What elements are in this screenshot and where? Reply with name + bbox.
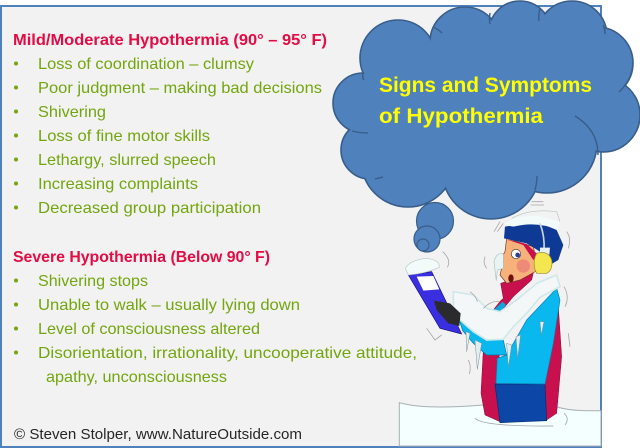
illustration: freezing person in snow	[399, 202, 601, 446]
bullet list: severe signs: Disorientation, irrationality, uncooperative attitude,	[38, 345, 417, 362]
bullet list: mild signs: Shivering	[38, 104, 106, 121]
bullet list: mild signs	[14, 56, 322, 217]
scarf	[490, 273, 533, 316]
bullet list: mild signs: Increasing complaints	[38, 176, 198, 193]
hat band	[506, 239, 538, 260]
heading: mild/moderate hypothermia: Mild/Moderate Hypothermia (90° – 95° F)	[13, 32, 327, 49]
shiver lines	[427, 202, 570, 426]
frozen nose drip	[494, 254, 503, 281]
hat snow	[503, 216, 560, 230]
snow on arm and shoulder	[453, 275, 560, 340]
glove	[434, 301, 461, 326]
bullet list: mild signs: Loss of fine motor skills	[38, 128, 210, 145]
bullet list: mild signs: Poor judgment – making bad decisions	[38, 80, 322, 97]
cloud title	[379, 74, 592, 128]
thought bubbles	[414, 202, 454, 252]
jacket collar	[489, 302, 506, 317]
book page	[417, 276, 439, 291]
bullet list: severe signs: Unable to walk – usually lying down	[38, 297, 300, 314]
eye	[511, 249, 521, 259]
cloud title: of Hypothermia	[379, 105, 543, 128]
text block: mild and moderate hypothermia	[13, 32, 327, 217]
cloud title: Signs and Symptoms	[379, 74, 592, 97]
bullet list: mild signs: Lethargy, slurred speech	[38, 152, 216, 169]
face	[499, 238, 538, 283]
earmuff	[534, 223, 552, 273]
bullet list: severe signs: Shivering stops	[38, 273, 148, 290]
coat right	[544, 307, 562, 420]
book snow	[405, 258, 439, 275]
bullet list: severe signs: apathy, unconsciousness	[46, 369, 227, 386]
bullet list: severe signs: Level of consciousness altered	[38, 321, 260, 338]
icicles	[466, 322, 544, 369]
bullet list: severe signs	[14, 273, 417, 386]
thought cloud	[333, 1, 640, 219]
trousers	[495, 384, 547, 423]
text block: severe hypothermia	[13, 249, 417, 386]
heading: severe hypothermia: Severe Hypothermia (Below 90° F)	[13, 249, 270, 266]
bullet list: mild signs: Decreased group participation	[38, 200, 261, 217]
snow ground	[399, 403, 601, 446]
sleeve	[459, 320, 507, 355]
coat left	[481, 350, 500, 422]
bullet list: mild signs: Loss of coordination – clumsy	[38, 56, 254, 73]
mouth	[508, 274, 514, 282]
hat	[504, 222, 563, 264]
book	[408, 272, 462, 334]
jacket front	[496, 288, 560, 384]
copyright credit: © Steven Stolper, www.NatureOutside.com	[14, 427, 302, 443]
